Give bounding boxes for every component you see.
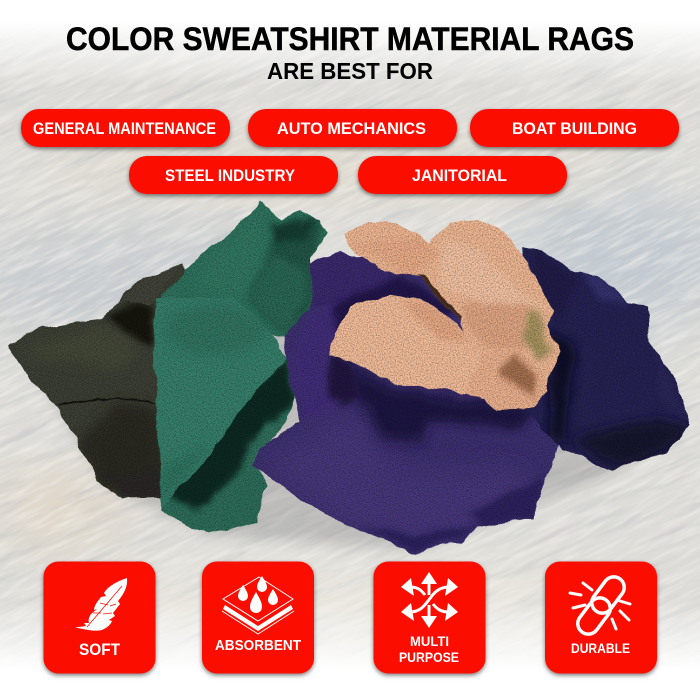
pill: auto mechanics <box>248 109 457 147</box>
tile: durable <box>545 562 657 674</box>
rag: peach front <box>329 294 548 411</box>
icon: layers and drops <box>222 576 294 634</box>
pill: auto mechanics: AUTO MECHANICS <box>277 120 426 138</box>
icon: chain link <box>570 573 630 638</box>
pill: general maintenance <box>21 109 230 147</box>
pill: steel industry: STEEL INDUSTRY <box>165 167 295 185</box>
subtitle: ARE BEST FOR <box>267 58 433 84</box>
pill: steel industry <box>129 156 338 194</box>
rag: green front flap <box>150 295 290 510</box>
label: multi: MULTI <box>410 633 449 649</box>
title: COLOR SWEATSHIRT MATERIAL RAGS <box>66 21 634 57</box>
rag: purple <box>245 245 565 560</box>
tile: soft <box>44 562 156 674</box>
soft floor shadow <box>30 265 680 550</box>
tile: absorbent <box>202 562 314 674</box>
pill: general maintenance: GENERAL MAINTENANCE <box>33 120 216 138</box>
pill: janitorial <box>358 156 567 194</box>
rag pile photo <box>0 195 695 560</box>
pill: boat building: BOAT BUILDING <box>512 120 637 138</box>
label: soft: SOFT <box>79 641 120 659</box>
label: purpose: PURPOSE <box>399 649 459 665</box>
rag: peach back <box>340 215 565 415</box>
pill: janitorial: JANITORIAL <box>412 167 507 185</box>
rag: navy <box>522 247 690 471</box>
icon: crossing arrows <box>401 572 458 628</box>
rag: dark olive <box>8 264 186 498</box>
label: durable: DURABLE <box>571 641 630 656</box>
label: absorbent: ABSORBENT <box>215 637 301 654</box>
rag: green lower <box>161 358 295 532</box>
pill: boat building <box>470 109 679 147</box>
tile: multi purpose <box>374 562 486 674</box>
rag: green back <box>160 200 328 337</box>
icon: feather <box>75 578 127 631</box>
